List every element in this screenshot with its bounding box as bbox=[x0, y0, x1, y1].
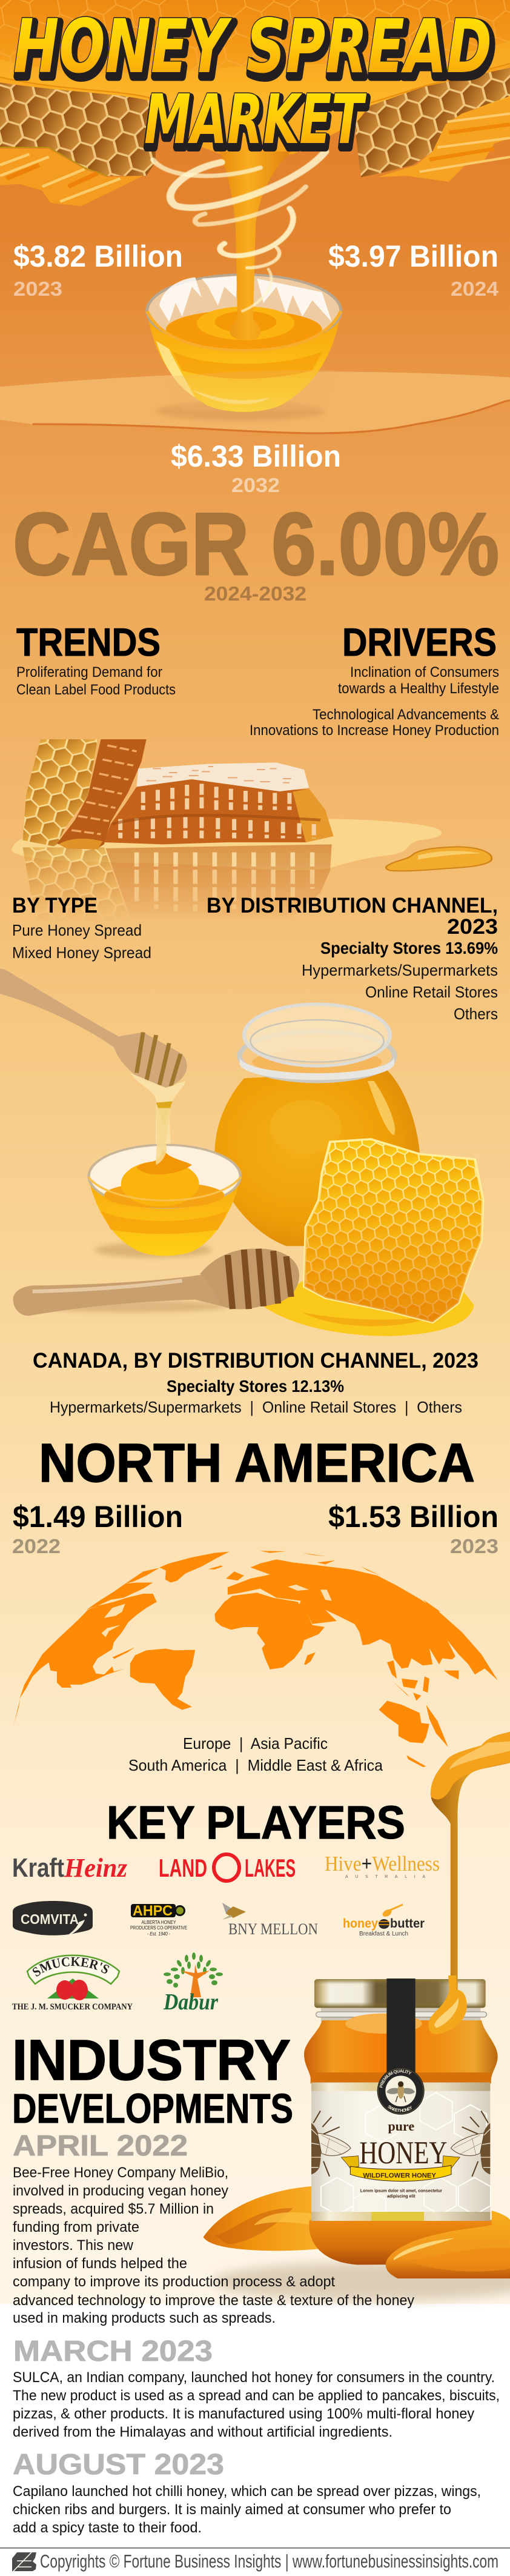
april 2022 development: Bee-Free Honey Company MeliBio, bbox=[13, 2165, 228, 2181]
logo: Hive and Wellness: AUSTRALIA bbox=[345, 1875, 425, 1879]
dipper drip bbox=[156, 1108, 171, 1165]
hero honeycomb header bbox=[0, 0, 510, 206]
market value 2023: 2023 bbox=[13, 278, 62, 300]
industry developments heading: DEVELOPMENTS bbox=[12, 2085, 293, 2132]
logo: BNY Mellon: BNY MELLON bbox=[228, 1920, 318, 1938]
logo: AHPC: PRODUCERS CO-OPERATIVE bbox=[130, 1925, 187, 1931]
logo: Kraft Heinz: Kraft bbox=[12, 1853, 64, 1883]
right honeycomb bbox=[354, 68, 510, 177]
market value 2032: $6.33 Billion bbox=[171, 439, 341, 473]
jar lid bbox=[314, 1979, 486, 2008]
logo: Kraft Heinz: Heinz bbox=[64, 1853, 127, 1883]
logo: Honey Butter: Breakfast & Lunch bbox=[359, 1931, 408, 1937]
other regions list: South America | Middle East & Africa bbox=[128, 1756, 383, 1774]
north america 2022 value bbox=[12, 1500, 183, 1557]
market value 2032 bbox=[171, 439, 341, 496]
honey stream and bowl bbox=[0, 151, 510, 433]
north america 2023 value: 2023 bbox=[450, 1535, 498, 1557]
market value 2024: 2024 bbox=[451, 278, 499, 300]
medallion bee bbox=[386, 2082, 415, 2102]
pure honey jar bbox=[304, 1979, 510, 2278]
august 2023 development: chicken ribs and burgers. It is mainly aimed at consumer who prefer to bbox=[13, 2501, 451, 2518]
jar neck bbox=[316, 2006, 486, 2022]
logo: Land O Lakes: LAKES bbox=[245, 1854, 296, 1882]
puddle overlay bbox=[162, 370, 338, 411]
logo: Land O Lakes: LAND bbox=[159, 1854, 207, 1882]
april 2022 development: funding from private bbox=[13, 2219, 139, 2235]
CAGR callout: 2024-2032 bbox=[204, 582, 306, 605]
april 2022 development: involved in producing vegan honey bbox=[13, 2183, 228, 2199]
small honey blob bbox=[386, 847, 492, 871]
march 2023 development: pizzas, & other products. It is manufactured using 100% multi-floral honey bbox=[13, 2406, 474, 2422]
left honey blob bbox=[204, 2186, 322, 2251]
horizontal dipper bbox=[13, 1249, 299, 1316]
north america 2023 value: $1.53 Billion bbox=[328, 1500, 498, 1534]
august 2023 development: Capilano launched hot chilli honey, which can be spread over pizzas, wings, bbox=[13, 2483, 481, 2500]
canada distribution block bbox=[33, 1349, 479, 1416]
honeycomb illustration bbox=[12, 739, 492, 921]
logo: Land O Lakes bbox=[159, 1854, 296, 1882]
title line 2 bbox=[144, 81, 368, 164]
by type block: Mixed Honey Spread bbox=[12, 944, 151, 962]
jar base honey bbox=[309, 2220, 493, 2265]
logo: BNY Mellon bbox=[222, 1903, 318, 1938]
march 2023 development: MARCH 2023 bbox=[13, 2335, 213, 2368]
honey surface bbox=[166, 310, 322, 349]
april 2022 development: infusion of funds helped the bbox=[13, 2255, 187, 2272]
market value 2024 bbox=[328, 239, 499, 300]
april 2022 development: advanced technology to improve the taste & texture of the honey bbox=[13, 2292, 414, 2309]
logo: Smuckers bbox=[12, 1955, 133, 2012]
market value 2032: 2032 bbox=[231, 474, 280, 496]
by distribution channel block: Specialty Stores 13.69% bbox=[320, 939, 498, 957]
logo: AHPC bbox=[130, 1903, 187, 1937]
honey jar bbox=[214, 1004, 420, 1246]
logo: AHPC: AHPC bbox=[133, 1903, 173, 1919]
by distribution channel block: Online Retail Stores bbox=[365, 983, 498, 1001]
bowl interior bbox=[147, 275, 341, 348]
jar label: adipiscing elit bbox=[387, 2195, 416, 2199]
title line 2: MARKET bbox=[144, 81, 366, 159]
swirls bbox=[153, 151, 325, 311]
puddle bbox=[12, 819, 442, 870]
logo: Comvita: COMVITA bbox=[21, 1911, 79, 1927]
north america 2022 value: 2022 bbox=[12, 1535, 61, 1557]
bee right bbox=[451, 2111, 490, 2177]
by type block bbox=[12, 894, 151, 962]
title bbox=[13, 4, 494, 164]
august 2023 development: AUGUST 2023 bbox=[13, 2449, 224, 2481]
april 2022 development: used in making products such as spreads. bbox=[13, 2310, 276, 2326]
april 2022 development: APRIL 2022 bbox=[13, 2130, 188, 2162]
april 2022 development: investors. This new bbox=[13, 2237, 134, 2254]
trends block bbox=[16, 620, 176, 698]
other regions list bbox=[128, 1734, 383, 1774]
title line 2: MARKET bbox=[145, 85, 368, 164]
bowl shadow bbox=[156, 401, 325, 421]
stream bbox=[219, 151, 291, 341]
left honeycomb bbox=[0, 82, 156, 176]
logo: AHPC: - Est. 1940 - bbox=[147, 1931, 170, 1937]
right wax strip bbox=[377, 98, 510, 182]
right honey blob bbox=[386, 2211, 510, 2278]
by type block: Pure Honey Spread bbox=[12, 921, 142, 939]
comb reflection bbox=[23, 844, 332, 921]
medallion: PREMIUM QUALITY bbox=[379, 2069, 412, 2088]
trends block: TRENDS bbox=[16, 620, 161, 664]
logo: Honey Butter: butter bbox=[390, 1917, 425, 1931]
bowl body bbox=[147, 311, 341, 412]
by type block: BY TYPE bbox=[12, 894, 98, 917]
logo: Dabur bbox=[163, 1952, 223, 2015]
march 2023 development bbox=[13, 2335, 500, 2440]
march 2023 development: SULCA, an Indian company, launched hot honey for consumers in the country. bbox=[13, 2369, 495, 2386]
other regions list: Europe | Asia Pacific bbox=[183, 1734, 328, 1752]
industry developments heading bbox=[12, 2028, 293, 2132]
market value 2023: $3.82 Billion bbox=[13, 239, 183, 273]
logo: Hive and Wellness: Hive+Wellness bbox=[325, 1852, 440, 1875]
logo: Dabur: Dabur bbox=[163, 1989, 219, 2015]
logo: Smuckers: SMUCKER'S bbox=[33, 1957, 109, 1977]
trends block: Clean Label Food Products bbox=[16, 682, 176, 698]
march 2023 development: derived from the Himalayas and without artificial ingredients. bbox=[13, 2424, 392, 2440]
by distribution channel block: BY DISTRIBUTION CHANNEL, bbox=[207, 894, 498, 917]
medallion: SWEET HONEY bbox=[388, 2105, 412, 2112]
april 2022 development bbox=[13, 2130, 414, 2326]
honey dipper diagonal bbox=[0, 969, 187, 1151]
trends block: Proliferating Demand for bbox=[16, 664, 162, 681]
honeycomb piece bbox=[304, 1139, 483, 1322]
canada distribution block: CANADA, BY DISTRIBUTION CHANNEL, 2023 bbox=[33, 1349, 479, 1373]
drivers block: Technological Advancements & bbox=[313, 707, 499, 723]
august 2023 development: add a spicy taste to their food. bbox=[13, 2520, 202, 2536]
small honey bowl bbox=[88, 1145, 240, 1257]
logo: Honey Butter: honey bbox=[343, 1917, 378, 1931]
by distribution channel block bbox=[207, 894, 498, 1023]
medallion bbox=[377, 2068, 425, 2115]
market value 2024: $3.97 Billion bbox=[328, 239, 498, 273]
north america 2022 value: $1.49 Billion bbox=[13, 1500, 183, 1534]
logo: Honey Butter bbox=[343, 1905, 425, 1937]
logo: Kraft Heinz bbox=[12, 1853, 127, 1883]
canada distribution block: Specialty Stores 12.13% bbox=[167, 1377, 344, 1396]
world map bbox=[14, 1551, 498, 1767]
ribbon bbox=[341, 2156, 460, 2182]
jar label: HONEY bbox=[359, 2135, 447, 2171]
footer logo bbox=[12, 2552, 36, 2571]
april 2022 development: spreads, acquired $5.7 Million in bbox=[13, 2201, 214, 2217]
industry developments heading: INDUSTRY bbox=[12, 2028, 291, 2092]
jar shadow bbox=[212, 2262, 510, 2301]
north america 2023 value bbox=[328, 1500, 498, 1557]
north america heading: NORTH AMERICA bbox=[39, 1433, 475, 1494]
lying comb slab bbox=[104, 779, 333, 844]
left wax strip bbox=[0, 149, 143, 206]
key players heading: KEY PLAYERS bbox=[107, 1797, 405, 1849]
by distribution channel block: 2023 bbox=[447, 915, 498, 939]
drivers block bbox=[250, 620, 499, 739]
ribbon: WILDFLOWER HONEY bbox=[363, 2172, 436, 2179]
market value 2023 bbox=[13, 239, 183, 300]
march 2023 development: The new product is used as a spread and can be applied to pancakes, biscuits, bbox=[13, 2388, 500, 2404]
honey products illustration bbox=[0, 969, 483, 1336]
bee left bbox=[311, 2111, 351, 2177]
wax cap bbox=[137, 762, 309, 791]
jar label: Lorem ipsum dolor sit amet, consectetur bbox=[360, 2189, 442, 2194]
jar label bbox=[311, 2083, 491, 2221]
by distribution channel block: Hypermarkets/Supermarkets bbox=[302, 961, 498, 979]
canada distribution block: Hypermarkets/Supermarkets | Online Retail Stores | Others bbox=[50, 1398, 462, 1416]
drivers block: Inclination of Consumers bbox=[350, 664, 499, 681]
logo: Comvita bbox=[13, 1901, 93, 1937]
april 2022 development: company to improve its production process & adopt bbox=[13, 2274, 335, 2290]
by distribution channel block: Others bbox=[454, 1005, 498, 1023]
logo: AHPC: ALBERTA HONEY bbox=[142, 1920, 176, 1925]
drivers block: towards a Healthy Lifestyle bbox=[338, 681, 499, 697]
jar honey body bbox=[304, 2014, 498, 2083]
black band bbox=[386, 1979, 416, 2074]
august 2023 development bbox=[13, 2449, 481, 2536]
honey drip bbox=[428, 1732, 510, 2034]
logo: Smuckers: THE J. M. SMUCKER COMPANY bbox=[12, 2002, 133, 2012]
jar label: pure bbox=[388, 2118, 414, 2134]
puddle under bowl bbox=[0, 371, 510, 433]
honey puddle bbox=[263, 1281, 474, 1336]
upright comb slab bbox=[23, 739, 98, 847]
